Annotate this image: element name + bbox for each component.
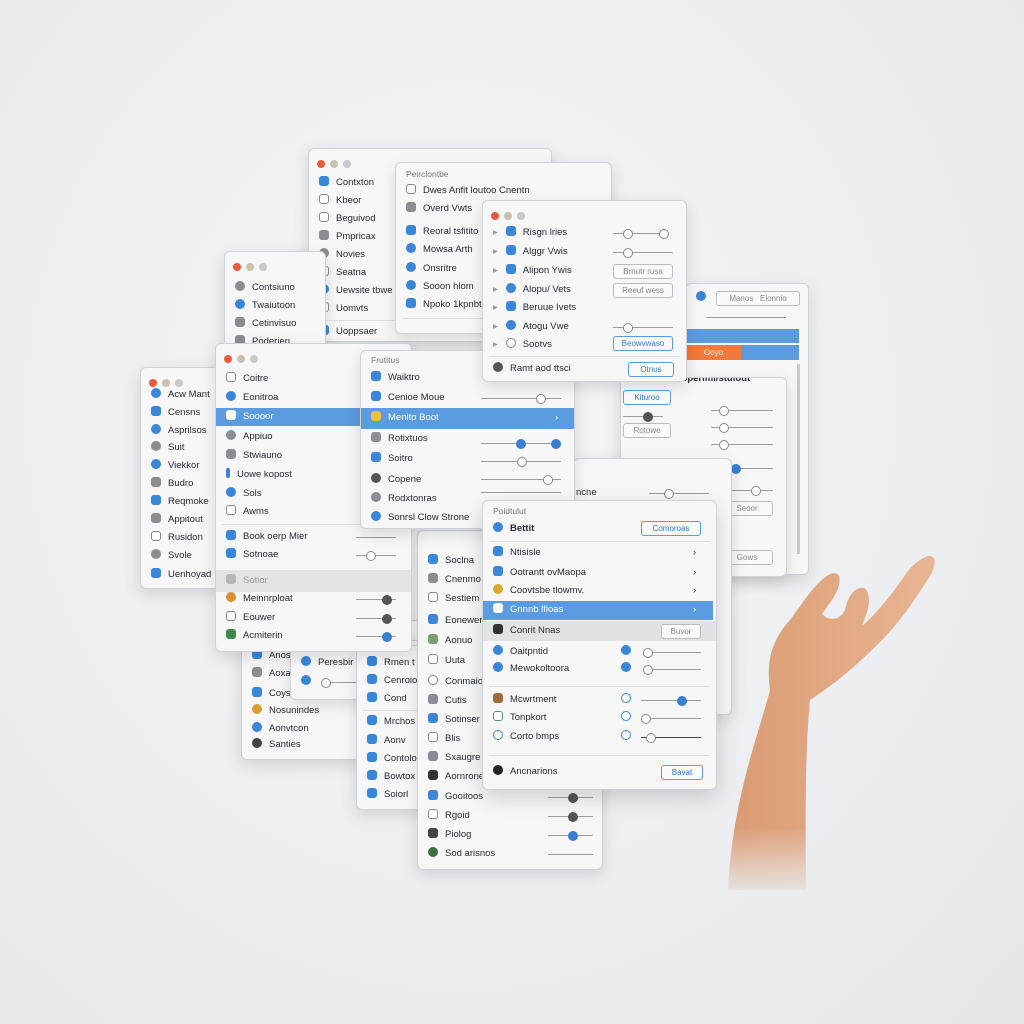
- window: left main list: Awms: [243, 506, 269, 517]
- window: right middle: Rotowe: [633, 426, 661, 435]
- window: bottom left list: Aonvtcon: [269, 723, 309, 734]
- window: top back list: Pmpricax: [336, 231, 376, 242]
- window: right back: Manos Elonnio: [729, 294, 787, 303]
- window: bottom left list: Aoxal: [269, 668, 293, 679]
- window: right middle: Seoor: [736, 504, 758, 513]
- window: top right controls: ▸ Sootvs: [493, 339, 552, 350]
- window: left main list: Book oerp Mier: [243, 531, 307, 542]
- window: top back list: [308, 148, 552, 342]
- window: bottom popup: ›: [693, 567, 696, 578]
- window: top right controls: Ramt aod ttsci: [510, 363, 571, 374]
- window: left main list: [215, 343, 412, 652]
- window: bottom popup: Poldtulut: [493, 506, 526, 516]
- window: leftmost list: Viekkor: [168, 460, 200, 471]
- highlighted row: ›: [693, 604, 696, 615]
- window: top back list: Kbeor: [336, 195, 361, 206]
- window: bottom middle narrow: Aonv: [384, 735, 406, 746]
- window: left main list: Coitre: [243, 373, 268, 384]
- window: bottom middle tall list: Sod arisnos: [445, 848, 495, 859]
- window: leftmost list: [140, 367, 227, 589]
- window: left back small: Contsiuno: [252, 282, 295, 293]
- window: right back: Ooyo: [704, 348, 723, 357]
- window: bottom popup: ›: [693, 547, 696, 558]
- window: bottom left list: [241, 620, 423, 760]
- window: bottom popup: Mewokoltoora: [510, 663, 569, 674]
- window: top back list: Beguivod: [336, 213, 376, 224]
- window: preferences back: Npoko 1kpnbt: [423, 299, 482, 310]
- hand: [728, 556, 935, 890]
- window: bottom popup: Ootrantt ovMaopa: [510, 567, 586, 578]
- window: bottom middle narrow: Cond: [384, 693, 407, 704]
- window: bottom left list: Coys: [269, 688, 291, 699]
- window: bottom middle tall list: [417, 530, 603, 870]
- window: preferences back: Mowsa Arth: [423, 244, 473, 255]
- window: top back list: Uomvts: [336, 303, 368, 314]
- window: top right controls: Otnus: [640, 365, 662, 374]
- window: preferences back: Peirclontbe: [406, 169, 449, 179]
- window: left back small: Poderien: [252, 336, 290, 347]
- window: top right controls: ▸ Atogu Vwe: [493, 321, 569, 332]
- window: bottom popup: ›: [693, 585, 696, 596]
- window: left main list: Uowe kopost: [237, 469, 292, 480]
- window: top right controls: Brnutr rusa: [623, 267, 663, 276]
- window: small presbir: [290, 640, 422, 700]
- window: bottom popup: Tonpkort: [510, 712, 546, 723]
- window: bottom popup: Comoroas: [653, 524, 689, 533]
- window: menu Frutitus: Copene: [388, 474, 421, 485]
- window: top back list: Contxton: [336, 177, 374, 188]
- window: leftmost list: Acw Mant: [168, 389, 210, 400]
- window: right middle: Gows: [737, 553, 757, 562]
- window: bottom middle narrow: Rmen t: [384, 657, 415, 668]
- window: top back list: Novies: [336, 249, 365, 260]
- window: bottom left list: Santies: [269, 739, 301, 750]
- window: bottom middle tall list: Eonewer: [445, 615, 482, 626]
- window: middle right back: [573, 458, 732, 715]
- window: menu Frutitus: Soitro: [388, 453, 413, 464]
- window: top right controls: ▸ Beruue Ivets: [493, 302, 576, 313]
- window: bottom middle tall list: Piolog: [445, 829, 471, 840]
- window: bottom popup: Coovtsbe tlowmv.: [510, 585, 584, 596]
- window: bottom middle tall list: Sestiem: [445, 593, 479, 604]
- window: left main list: Sotnoae: [243, 549, 278, 560]
- window: menu Frutitus: Frutitus: [371, 355, 399, 365]
- window: bottom left list: Nosunindes: [269, 705, 319, 716]
- window: left main list: Eouwer: [243, 612, 275, 623]
- window: left main list: Acmiterin: [243, 630, 283, 641]
- window: bottom popup: Bettit: [510, 523, 534, 534]
- window: bottom popup: Ntisisle: [510, 547, 541, 558]
- window: bottom middle narrow: Cenroio: [384, 675, 417, 686]
- window: left back small: Twaiutoon: [252, 300, 295, 311]
- window: middle right back: ncne: [576, 487, 597, 498]
- window: bottom popup: Corto bmps: [510, 731, 559, 742]
- window: left main list: Appiuo: [243, 431, 273, 442]
- window: menu Frutitus: Sonrsl Clow Strone: [388, 512, 469, 523]
- window: bottom middle narrow: [356, 645, 428, 810]
- window: leftmost list: Reqmoke: [168, 496, 209, 507]
- window: bottom middle tall list: Cnenmo: [445, 574, 481, 585]
- window: right middle: [620, 377, 787, 577]
- window: bottom middle tall list: Aonuo: [445, 635, 472, 646]
- window: preferences back: Overd Vwts: [423, 203, 472, 214]
- window: bottom middle narrow: Mrchos: [384, 716, 415, 727]
- window: menu Frutitus: [360, 350, 575, 529]
- window: left main list: Stwiauno: [243, 450, 282, 461]
- window: top back list: Uoppsaer: [336, 326, 377, 337]
- window: bottom middle narrow: Contolo: [384, 753, 417, 764]
- window: leftmost list: Asprilsos: [168, 425, 207, 436]
- window: bottom popup: Buvor: [671, 627, 691, 636]
- window: leftmost list: Censns: [168, 407, 200, 418]
- window: left main list: Eonitroa: [243, 392, 278, 403]
- window: bottom middle narrow: Bowtox: [384, 771, 415, 782]
- highlighted row: Soooor: [243, 411, 274, 422]
- window: preferences back: Dwes Anfit loutoo Cnentn: [423, 185, 530, 196]
- window: top back list: Seatna: [336, 267, 366, 278]
- window: bottom middle tall list: Cutis: [445, 695, 467, 706]
- window: leftmost list: Budro: [168, 478, 193, 489]
- window: top right controls: ▸ Alipon Ywis: [493, 265, 572, 276]
- window: bottom middle tall list: Aornrone: [445, 771, 484, 782]
- window: menu Frutitus: Rodxtonras: [388, 493, 437, 504]
- window: bottom popup: Oaitpntid: [510, 646, 548, 657]
- highlighted menu row: ›: [555, 412, 558, 423]
- window: top back list: Uewsite tbwe: [336, 285, 392, 296]
- window: leftmost list: Rusidon: [168, 532, 203, 543]
- window: right back: [685, 283, 809, 575]
- window: bottom popup: [482, 500, 717, 790]
- window: bottom popup: Ancnarions: [510, 766, 558, 777]
- window: left back small: Cetinvisuo: [252, 318, 296, 329]
- window: left main list: Sotior: [243, 575, 268, 586]
- window: leftmost list: Appitout: [168, 514, 203, 525]
- window: bottom middle tall list: Gooitoos: [445, 791, 483, 802]
- window: bottom popup: Conrit Nnas: [510, 625, 560, 636]
- window: top right controls: ▸ Risgn lries: [493, 227, 567, 238]
- button blue: Beowvwaso: [622, 339, 664, 348]
- window: leftmost list: Svole: [168, 550, 192, 561]
- window: left main list: Meinnrploat: [243, 593, 293, 604]
- window: bottom popup: Mcwrtment: [510, 694, 556, 705]
- window: preferences back: Sooon hlom: [423, 281, 474, 292]
- highlighted menu row: Menito Boot: [388, 412, 439, 423]
- button blue: [613, 336, 673, 351]
- highlighted row: Gnnnb lfioas: [510, 604, 563, 615]
- highlighted row: [483, 601, 713, 620]
- window: bottom left list: Anos: [269, 650, 291, 661]
- window: preferences back: Onsritre: [423, 263, 457, 274]
- window: top right controls: Reeuf wess: [622, 286, 664, 295]
- window: preferences back: Reoral tsfitito: [423, 226, 478, 237]
- window: bottom middle tall list: Blis: [445, 733, 460, 744]
- window: top right controls: ▸ Alopu/ Vets: [493, 284, 571, 295]
- window: bottom middle narrow: Soiorl: [384, 789, 408, 800]
- window: leftmost list: Suit: [168, 442, 184, 453]
- highlighted row: [216, 408, 411, 426]
- window: menu Frutitus: Cenioe Moue: [388, 392, 445, 403]
- window: top right controls: [482, 200, 687, 382]
- window: bottom popup: Bavat: [672, 768, 692, 777]
- window: small presbir: Peresbir: [318, 657, 353, 668]
- window: menu Frutitus: Rotixtuos: [388, 433, 428, 444]
- window: bottom middle tall list: Sotinser: [445, 714, 480, 725]
- window: right middle: Kituroo: [634, 393, 660, 402]
- window: leftmost list: Uenhoyad: [168, 569, 211, 580]
- window: left back small: [224, 251, 326, 353]
- window: menu Frutitus: Waiktro: [388, 372, 420, 383]
- window: bottom middle tall list: Conmaio: [445, 676, 483, 687]
- highlighted menu row: [361, 408, 574, 429]
- window: left main list: Sols: [243, 488, 261, 499]
- window: bottom middle tall list: Uuta: [445, 655, 465, 666]
- window: bottom middle tall list: Sxaugre: [445, 752, 480, 763]
- window: bottom middle tall list: Soclna: [445, 555, 474, 566]
- window: top right controls: ▸ Alggr Vwis: [493, 246, 568, 257]
- window: bottom middle tall list: Rgoid: [445, 810, 470, 821]
- window: preferences back: [395, 162, 612, 334]
